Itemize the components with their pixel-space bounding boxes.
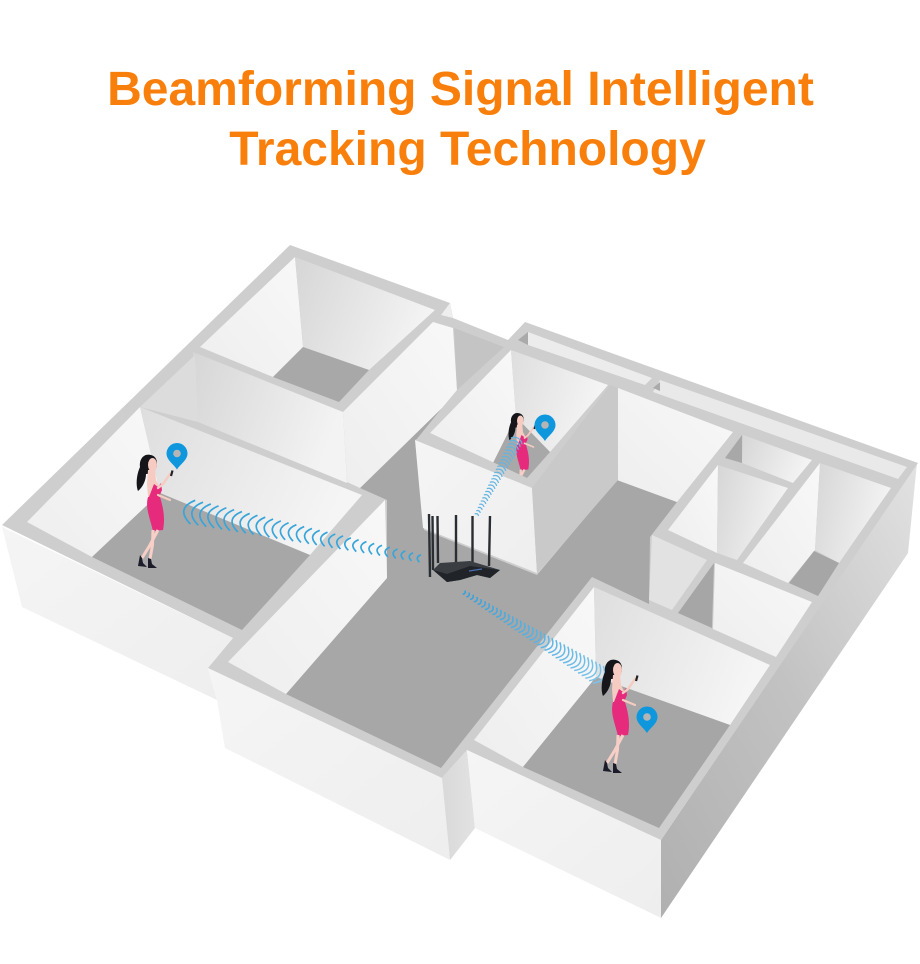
room: right block (649, 435, 891, 657)
person: left room (137, 455, 172, 568)
location pin: left room (166, 443, 188, 470)
room: lower right (474, 587, 770, 828)
wall tops (2, 245, 918, 840)
title (107, 63, 814, 176)
location pin: middle room (534, 414, 556, 441)
title: Tracking Technology (229, 123, 706, 176)
person: lower right room (602, 660, 638, 773)
title: Beamforming Signal Intelligent (107, 63, 814, 116)
room: middle front walls (415, 385, 618, 573)
room: left (27, 407, 387, 694)
floor plan (2, 245, 918, 918)
router (429, 514, 500, 582)
signal beam: router to left person (181, 498, 423, 570)
corridor strips (518, 332, 907, 479)
signal beam: router to lower right person (459, 584, 609, 686)
outer walls (2, 463, 917, 918)
central hall floor (286, 408, 677, 768)
room: top (140, 257, 504, 488)
person: middle room (509, 413, 535, 498)
signal beam: router to middle person (471, 435, 524, 518)
room: middle interior (430, 350, 733, 502)
location pin: lower right room (636, 706, 658, 733)
